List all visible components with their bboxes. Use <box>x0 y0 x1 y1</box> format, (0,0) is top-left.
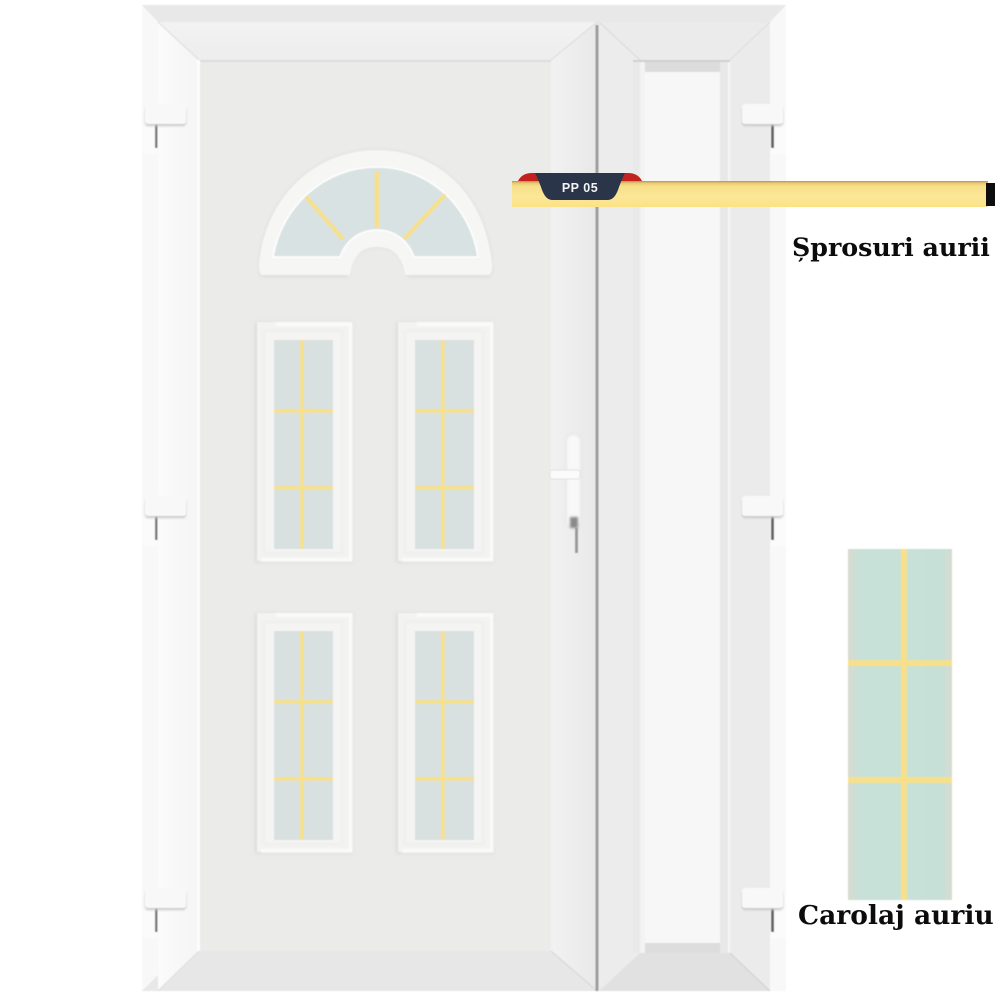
label: gold casing: Carolaj auriu <box>798 900 994 931</box>
gold bar <box>512 181 988 207</box>
semicircular window with golden muntins <box>259 150 492 277</box>
door sash <box>158 22 597 991</box>
right hinges <box>742 104 786 939</box>
sidelight frame <box>599 22 770 991</box>
sidelight glass <box>645 72 720 943</box>
golden muntin profile bar PP 05 <box>512 173 995 207</box>
black end cap <box>986 183 995 206</box>
label tab <box>535 173 625 200</box>
door panel <box>197 60 551 951</box>
red tab right <box>620 173 642 181</box>
divider between door and sidelight <box>596 25 598 991</box>
lower left window <box>255 613 353 854</box>
label text: PP 05 <box>562 181 598 195</box>
door handle <box>550 434 581 553</box>
label: muntins: Șprosuri aurii <box>792 232 990 262</box>
door illustration <box>142 5 786 991</box>
upper left window <box>255 322 353 563</box>
upper right window <box>396 322 494 563</box>
outer frame <box>142 5 786 991</box>
glass sample with golden muntins <box>848 549 952 900</box>
left hinges <box>143 104 186 939</box>
red tab left <box>518 173 540 181</box>
lower right window <box>396 613 494 854</box>
